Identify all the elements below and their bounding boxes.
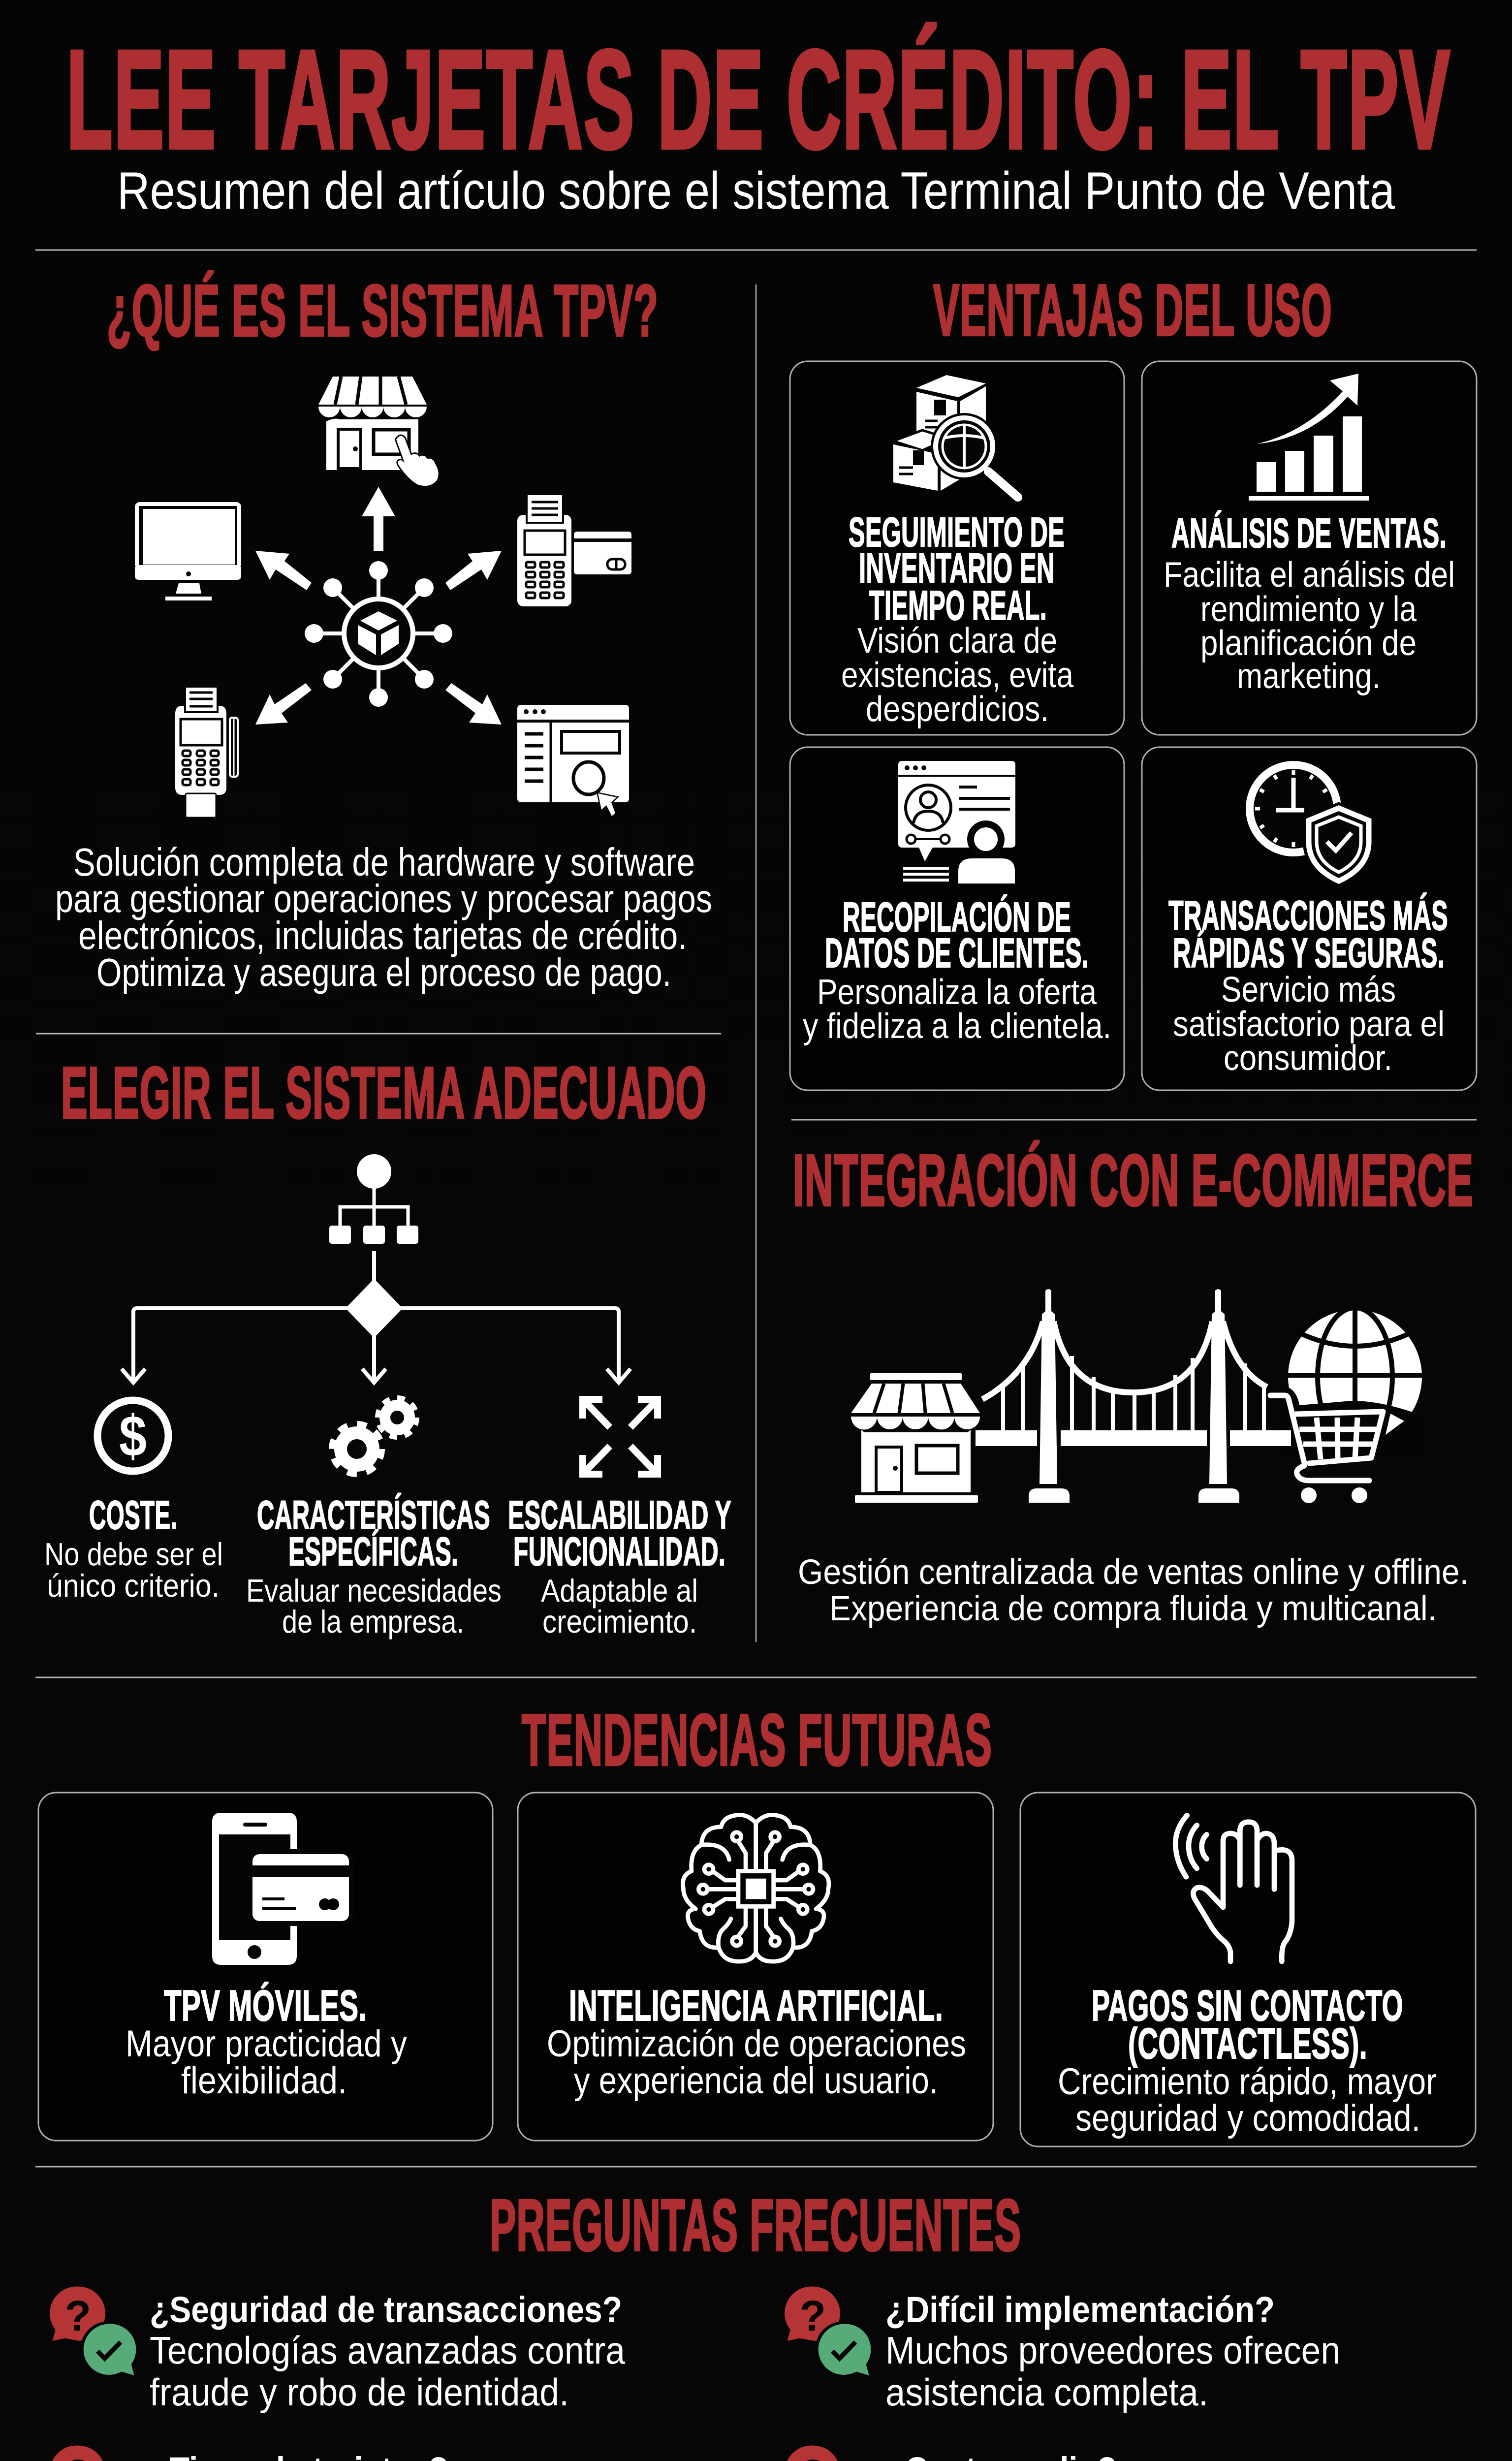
faq: seguridad: fraude y robo de identidad. (150, 2370, 569, 2414)
icon: desktop monitor (135, 504, 241, 600)
option: escalabilidad (508, 1399, 731, 1640)
icon: question and check bubbles: ? (65, 2292, 91, 2340)
icon: web window with magnifier and cursor (517, 705, 629, 816)
panel: elegir el sistema adecuado (44, 1052, 731, 1640)
panel: preguntas frecuentes (50, 2185, 1431, 2461)
icon: central network hub (305, 561, 452, 707)
card: seguimiento de inventario: Visión clara de (857, 621, 1057, 661)
heading: tendencias: TENDENCIAS FUTURAS (522, 1700, 992, 1781)
card: seguimiento de inventario: INVENTARIO EN (859, 545, 1055, 591)
faq: implementación: ¿Difícil implementación? (885, 2289, 1275, 2330)
icon: growth chart (1249, 374, 1369, 501)
card: transacciones rápidas: satisfactorio para el (1173, 1005, 1445, 1044)
icon: globe (1280, 1307, 1427, 1457)
icon: payment terminal with card (517, 494, 631, 606)
faq: coste medio (785, 2446, 1431, 2461)
text: definición: para gestionar operaciones y procesar pagos (55, 877, 712, 920)
card: TPV móviles: TPV MÓVILES. (164, 1981, 367, 2030)
icon: phone with credit card (212, 1813, 354, 1965)
card: seguimiento de inventario (790, 361, 1124, 735)
icon: question and check bubbles (50, 2446, 137, 2461)
arrows: hub to devices (255, 487, 502, 725)
icon: shop with pointing hand (318, 377, 439, 486)
card: pagos sin contacto: Crecimiento rápido, mayor (1058, 2061, 1437, 2103)
faq: seguridad (50, 2287, 626, 2414)
bridge cables and towers (982, 1322, 1267, 1430)
card: inteligencia artificial (518, 1793, 993, 2141)
panel: tendencias futuras (38, 1700, 1476, 2146)
card: análisis de ventas: Facilita el análisis del (1164, 555, 1455, 595)
card: recopilación de datos (790, 747, 1124, 1090)
card: recopilación de datos: y fideliza a la clientela. (803, 1007, 1111, 1046)
faq: implementación: asistencia completa. (885, 2370, 1208, 2414)
option: escalabilidad: ESCALABILIDAD Y (508, 1493, 731, 1538)
card: transacciones rápidas: Servicio más (1221, 970, 1396, 1010)
card: seguimiento de inventario: SEGUIMIENTO DE (849, 509, 1065, 555)
text: integración description: Experiencia de compra fluida y multicanal. (829, 1589, 1437, 1628)
option: características (246, 1398, 502, 1640)
card: inteligencia artificial: Optimización de operaciones (547, 2023, 966, 2065)
card: seguimiento de inventario: desperdicios. (866, 690, 1049, 729)
icon: customer profile (898, 761, 1015, 883)
card: TPV móviles: Mayor practicidad y (126, 2023, 407, 2065)
text: integración description (798, 1553, 1469, 1628)
option: características: ESPECÍFICAS. (288, 1529, 458, 1574)
icon: dollar coin: $ (119, 1404, 147, 1469)
faq: implementación: Muchos proveedores ofrecen (885, 2329, 1340, 2372)
faq: seguridad: ¿Seguridad de transacciones? (150, 2289, 622, 2330)
card: recopilación de datos: DATOS DE CLIENTES. (825, 930, 1089, 976)
card: seguimiento de inventario: existencias, evita (841, 656, 1074, 695)
card: pagos sin contacto (1020, 1793, 1476, 2146)
heading: qué es: ¿QUÉ ES EL SISTEMA TPV? (107, 270, 659, 351)
icon: expanding arrows (583, 1399, 658, 1474)
card: seguimiento de inventario: TIEMPO REAL. (869, 582, 1047, 629)
icon: question and check bubbles: ? (800, 2292, 826, 2340)
text: definición: Solución completa de hardware y software (73, 840, 695, 884)
option: coste (44, 1400, 223, 1604)
text: definición: Optimiza y asegura el proceso de pago. (96, 950, 671, 994)
option: coste: COSTE. (89, 1493, 177, 1538)
option: coste: único criterio. (47, 1568, 220, 1604)
icon: decision flowchart (122, 1154, 630, 1383)
card: pagos sin contacto: (CONTACTLESS). (1128, 2019, 1367, 2068)
card: transacciones rápidas: consumidor. (1224, 1039, 1392, 1078)
icon: terminal lower left (175, 687, 238, 818)
icon: AI brain chip (683, 1815, 829, 1961)
icon: bridge linking store and online cart (851, 1289, 1427, 1503)
panel: ventajas del uso (790, 270, 1477, 1090)
icon: question and check bubbles (785, 2446, 872, 2461)
option: características: CARACTERÍSTICAS (257, 1493, 490, 1538)
panel: integración con e-commerce (793, 1140, 1474, 1628)
icon: gears (332, 1398, 416, 1474)
option: escalabilidad: crecimiento. (542, 1604, 697, 1640)
card: análisis de ventas: planificación de (1200, 624, 1417, 663)
card: transacciones rápidas (1142, 747, 1477, 1090)
card: análisis de ventas (1142, 361, 1477, 735)
heading: elegir: ELEGIR EL SISTEMA ADECUADO (61, 1052, 707, 1134)
option: escalabilidad: Adaptable al (541, 1573, 698, 1609)
card: inteligencia artificial: INTELIGENCIA ARTIFICIAL. (569, 1981, 943, 2030)
icon: contactless hand (1175, 1815, 1292, 1961)
panel: qué es el sistema TPV (55, 270, 712, 994)
icon: storefront (851, 1373, 980, 1503)
icon: question and check bubbles (50, 2287, 137, 2378)
option: coste: No debe ser el (44, 1536, 223, 1572)
option: características: de la empresa. (282, 1604, 464, 1640)
card: recopilación de datos: RECOPILACIÓN DE (843, 894, 1071, 940)
text: integración description: Gestión centralizada de ventas online y offline. (798, 1553, 1469, 1592)
icon: question and check bubbles (785, 2287, 872, 2378)
text: definición: electrónicos, incluidas tarjetas de crédito. (78, 914, 687, 957)
text: definición (55, 840, 712, 994)
icon: clock and shield (1250, 765, 1371, 883)
icon: dollar coin (97, 1400, 168, 1471)
card: pagos sin contacto: seguridad y comodidad. (1075, 2097, 1420, 2139)
card: inteligencia artificial: y experiencia del usuario. (574, 2060, 938, 2102)
faq: seguridad: Tecnologías avanzadas contra (150, 2329, 626, 2372)
heading: preguntas: PREGUNTAS FRECUENTES (490, 2185, 1021, 2266)
option: características: Evaluar necesidades (246, 1573, 502, 1609)
option: escalabilidad: FUNCIONALIDAD. (513, 1529, 725, 1574)
card: análisis de ventas: marketing. (1237, 657, 1381, 696)
faq: tipos de tarjetas (50, 2446, 716, 2461)
card: TPV móviles (38, 1793, 493, 2141)
card: TPV móviles: flexibilidad. (181, 2060, 347, 2102)
faq: implementación (785, 2287, 1340, 2414)
card: análisis de ventas: rendimiento y la (1200, 590, 1417, 629)
card: recopilación de datos: Personaliza la oferta (817, 973, 1097, 1012)
icon: boxes with magnifier (893, 375, 1018, 497)
icon: shopping cart (1270, 1395, 1383, 1503)
